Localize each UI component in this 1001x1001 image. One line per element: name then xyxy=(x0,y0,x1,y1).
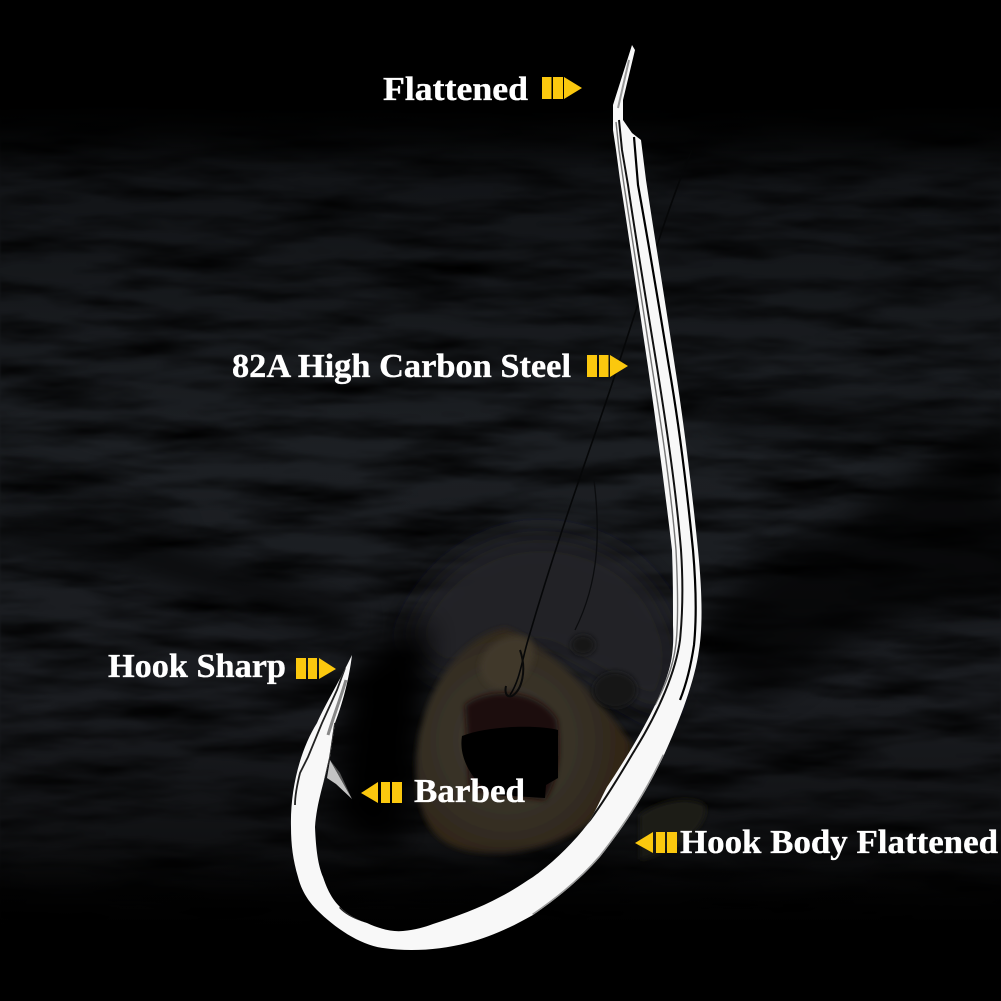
fish upper lip xyxy=(480,636,534,690)
hook shading lines xyxy=(295,60,696,925)
hook barb xyxy=(327,760,352,799)
arrow icon xyxy=(587,355,628,377)
label: Barbed xyxy=(361,773,525,810)
fish xyxy=(335,150,706,860)
dark swells xyxy=(0,410,1001,640)
fish throat xyxy=(461,727,558,798)
fish tail lip xyxy=(640,800,706,860)
label: 82A High Carbon Steel: 82A High Carbon Steel xyxy=(232,348,571,385)
label: Hook Sharp: Hook Sharp xyxy=(108,648,286,685)
fish head xyxy=(405,535,680,720)
label: Barbed: Barbed xyxy=(414,773,525,810)
hook xyxy=(291,45,702,950)
gill spots xyxy=(571,635,637,708)
fishing line xyxy=(510,150,692,695)
arrow icon xyxy=(296,658,336,679)
arrow icon xyxy=(542,77,582,99)
arrow icon xyxy=(361,782,402,803)
label: Flattened xyxy=(383,71,582,108)
label: Hook Body Flattened: Hook Body Flattened xyxy=(680,824,998,861)
fish cheek shadow xyxy=(335,625,430,850)
fish mouth xyxy=(416,628,633,853)
arrow icon xyxy=(635,832,677,853)
fish throat upper xyxy=(465,693,559,800)
label: Flattened: Flattened xyxy=(383,71,528,108)
